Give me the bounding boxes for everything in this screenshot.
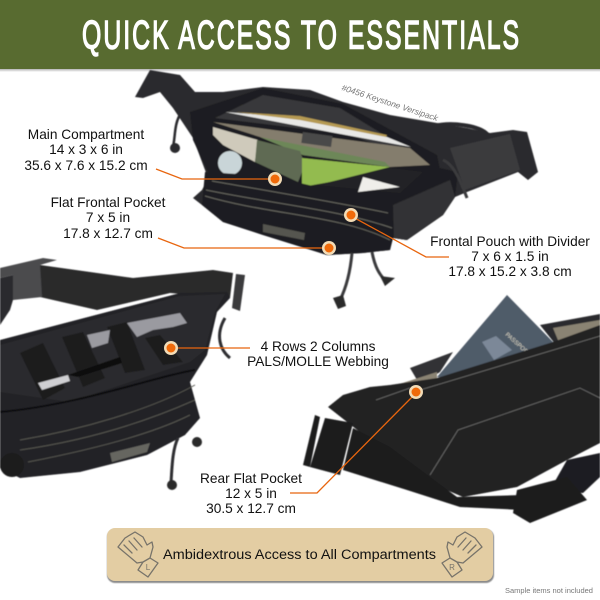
marker [409, 385, 423, 399]
callout: frontal pouch [344, 208, 590, 279]
label: 14 x 3 x 6 in [49, 142, 123, 157]
label: PALS/MOLLE Webbing [247, 354, 389, 369]
metal tools [87, 330, 110, 348]
photo: rear of pack with passport [303, 295, 600, 523]
leader line [158, 238, 329, 248]
lime package [302, 158, 390, 187]
banner text: Ambidextrous Access to All Compartments [163, 547, 436, 563]
label: 35.6 x 7.6 x 15.2 cm [24, 158, 148, 173]
side buckle [513, 477, 587, 523]
icon: right glove [442, 532, 482, 577]
cream tube [213, 127, 258, 162]
round cap [218, 151, 242, 175]
marker [322, 241, 336, 255]
label: 30.5 x 12.7 cm [206, 501, 296, 516]
leader line [171, 347, 250, 349]
label: 7 x 6 x 1.5 in [471, 249, 549, 264]
label: 17.8 x 15.2 x 3.8 cm [448, 264, 572, 279]
label: 12 x 5 in [225, 486, 277, 501]
photo: webbing side of pack [0, 258, 245, 490]
ambidextrous banner [107, 528, 494, 583]
label: Main Compartment [28, 127, 144, 142]
label: 7 x 5 in [86, 210, 130, 225]
icon: left glove: L [146, 563, 151, 572]
label: Flat Frontal Pocket [51, 195, 166, 210]
green flat card [260, 137, 390, 167]
banner [0, 0, 600, 72]
back panel [328, 325, 600, 497]
waist strap [343, 428, 523, 510]
callout: main compartment [24, 127, 282, 186]
label: Rear Flat Pocket [200, 471, 302, 486]
marker [164, 341, 178, 355]
title: QUICK ACCESS TO ESSENTIALS [82, 14, 519, 58]
logo tag [110, 443, 150, 462]
disclaimer: Sample items not included [505, 586, 593, 595]
leader line [351, 216, 449, 257]
icon: right glove: R [449, 563, 455, 572]
label: 17.8 x 12.7 cm [63, 226, 153, 241]
callout: flat frontal pocket [51, 195, 336, 255]
label: Frontal Pouch with Divider [430, 234, 590, 249]
white charger [358, 177, 400, 192]
callout: rear flat pocket [200, 385, 423, 516]
leader line [290, 393, 416, 493]
photo: open front of pack [135, 70, 538, 309]
green bottle [255, 140, 305, 182]
card in pocket [225, 112, 411, 147]
leader line [156, 169, 275, 179]
callout: webbing [164, 339, 389, 369]
marker [344, 208, 358, 222]
photo: rear of pack with passport: PASSPORT [504, 332, 532, 358]
icon: left glove [118, 532, 158, 577]
strap adjuster [303, 415, 353, 475]
marker [268, 172, 282, 186]
front pouch [202, 168, 458, 255]
passport [437, 295, 553, 380]
model caption: #0456 Keystone Versipack [340, 82, 440, 123]
label: 4 Rows 2 Columns [261, 339, 376, 354]
logo tag [263, 224, 305, 240]
webbing rows [20, 343, 65, 400]
